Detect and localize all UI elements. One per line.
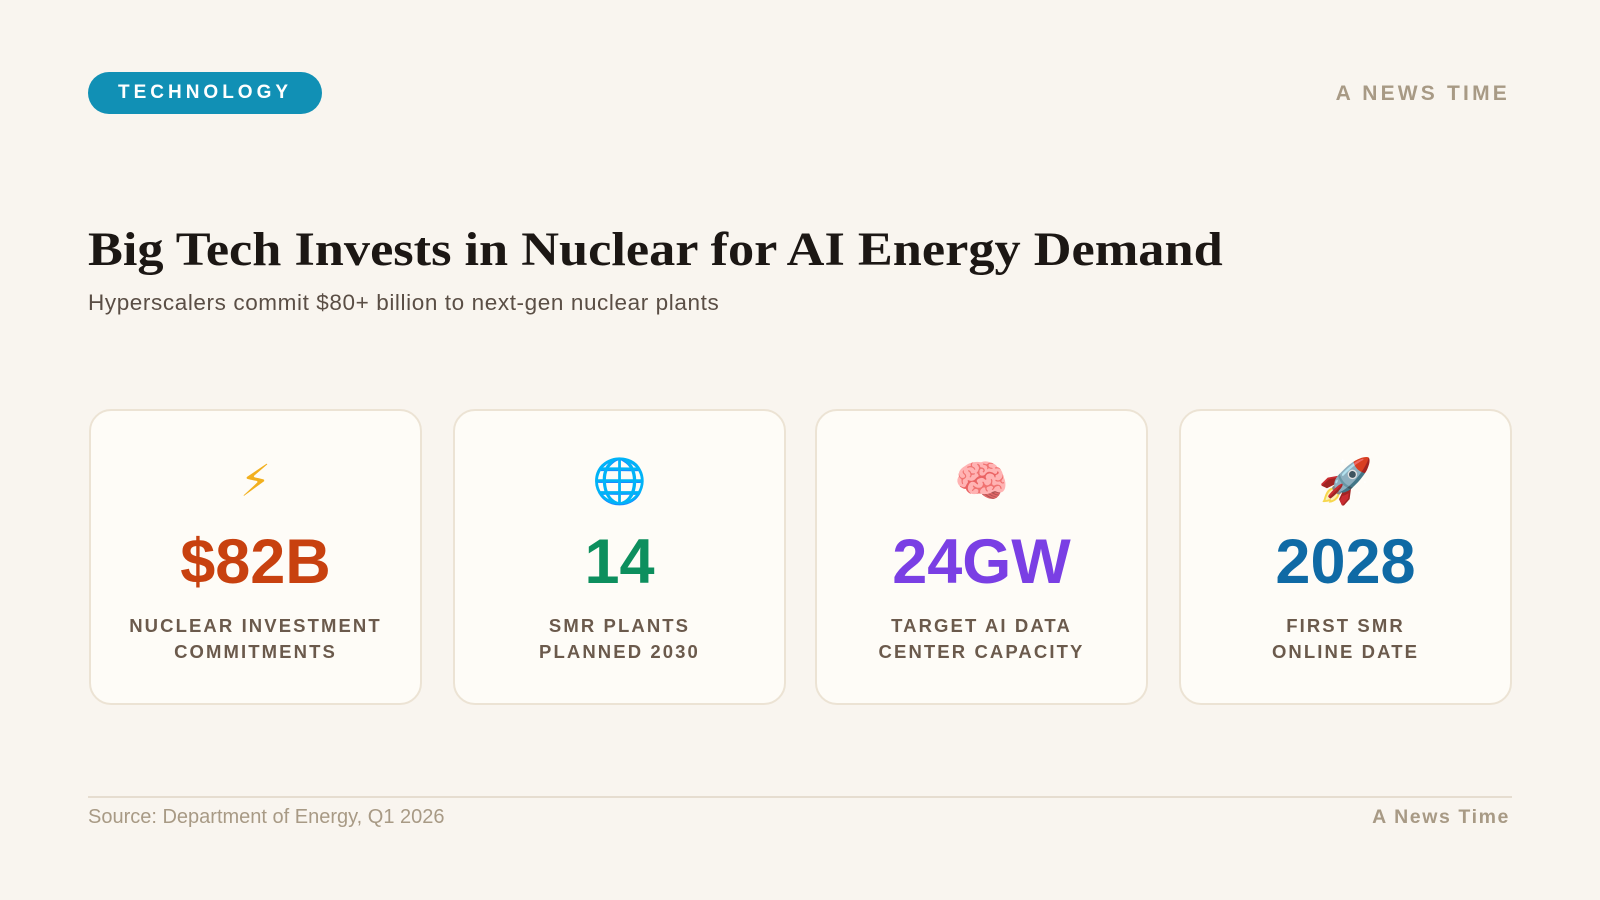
category pill [88,72,322,114]
subtitle: Hyperscalers commit $80+ billion to next-gen nuclear plants [88,290,719,315]
icon: rocket: 🚀 [1318,456,1373,507]
brand header: A NEWS TIME [1336,82,1510,105]
card: first SMR [1179,409,1512,705]
label: PLANNED 2030 [539,641,700,662]
label [1272,615,1419,662]
label: SMR PLANTS [549,615,690,636]
card: SMR plants [453,409,786,705]
label [879,615,1084,662]
card: investment [89,409,422,705]
label: COMMITMENTS [174,641,337,662]
label: NUCLEAR INVESTMENT [129,615,382,636]
stat: 2028: 2028 [1275,527,1416,597]
stat: $82B: $82B [180,527,331,597]
stat: 14: 14 [584,527,655,597]
label: FIRST SMR [1286,615,1405,636]
label [129,615,382,662]
footer brand: A News Time [1372,806,1510,828]
title: Big Tech Invests in Nuclear for AI Energy Demand [88,223,1223,276]
category pill: TECHNOLOGY [118,82,292,103]
icon: globe: 🌐 [592,456,647,507]
icon: brain: 🧠 [954,456,1009,507]
icon: lightning: ⚡ [240,456,271,507]
label: TARGET AI DATA [891,615,1072,636]
label: CENTER CAPACITY [879,641,1084,662]
stat: 24GW: 24GW [892,527,1071,597]
source note: Source: Department of Energy, Q1 2026 [88,806,444,828]
label: ONLINE DATE [1272,641,1419,662]
card: capacity [815,409,1148,705]
label [539,615,700,662]
